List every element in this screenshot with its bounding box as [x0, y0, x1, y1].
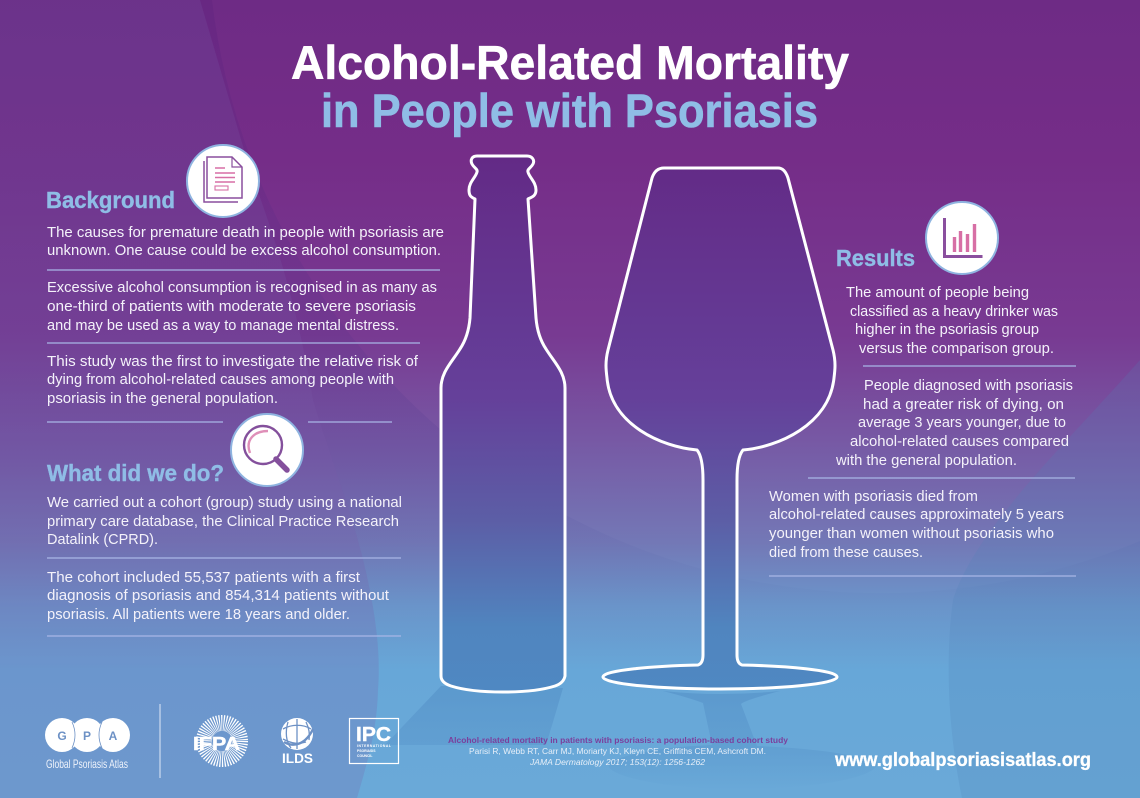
text: results paragraphs: with the general population. — [835, 453, 1017, 469]
title: in People with Psoriasis — [321, 84, 818, 137]
icon: bar chart — [926, 202, 998, 274]
logo: IFPA: IFPA — [193, 734, 240, 754]
logo: Global Psoriasis Atlas: A — [109, 729, 118, 743]
text: background paragraphs: The causes for premature death in people with psoriasis are — [47, 225, 444, 241]
text: results paragraphs: People diagnosed with psoriasis — [864, 378, 1073, 394]
text: background paragraphs: Excessive alcohol consumption is recognised in as many as — [47, 280, 437, 296]
logo: ILDS: ILDS — [282, 750, 313, 766]
citation: Parisi R, Webb RT, Carr MJ, Moriarty KJ, Kleyn CE, Griffiths CEM, Ashcroft DM. — [469, 746, 766, 756]
text: results paragraphs: had a greater risk of dying, on — [863, 397, 1064, 413]
text: results paragraphs — [769, 285, 1076, 576]
heading: results: Results — [836, 245, 915, 271]
text: results paragraphs: average 3 years younger, due to — [858, 415, 1066, 431]
logo: IFPA — [193, 723, 240, 759]
text: results paragraphs: higher in the psoriasis group — [855, 322, 1039, 338]
text: background paragraphs: This study was the first to investigate the relative risk of — [47, 354, 419, 370]
text: methods paragraphs: diagnosis of psoriasis and 854,314 patients without — [47, 588, 389, 604]
citation: JAMA Dermatology 2017; 153(12): 1256-1262 — [529, 757, 705, 767]
text: background paragraphs: unknown. One cause could be excess alcohol consumption. — [47, 243, 441, 259]
text: background paragraphs: and may be used as a way to manage mental distress. — [47, 318, 399, 334]
panel: results — [769, 202, 1076, 576]
text: results paragraphs: younger than women without psoriasis who — [769, 526, 1054, 542]
logo: ILDS — [281, 718, 313, 766]
text: results paragraphs: alcohol-related causes compared — [850, 434, 1069, 450]
text: methods paragraphs — [47, 495, 402, 636]
text: methods paragraphs: Datalink (CPRD). — [47, 532, 158, 548]
icon: document — [187, 145, 259, 217]
text: results paragraphs: died from these causes. — [769, 545, 923, 561]
text: results paragraphs: alcohol-related causes approximately 5 years — [769, 507, 1064, 523]
text: methods paragraphs: psoriasis. All patients were 18 years and older. — [47, 607, 350, 623]
text: results paragraphs: Women with psoriasis died from — [769, 489, 978, 505]
panel: what did we do — [47, 414, 402, 636]
logo: IPC: IPC — [356, 724, 391, 746]
heading: what did we do: What did we do? — [47, 460, 224, 486]
citation — [448, 735, 788, 767]
website url: www.globalpsoriasisatlas.org — [834, 750, 1091, 771]
text: results paragraphs: The amount of people being — [846, 285, 1029, 301]
text: results paragraphs: classified as a heavy drinker was — [850, 304, 1058, 320]
shadow: bottle and glass reflections — [385, 686, 878, 789]
logo: Global Psoriasis Atlas: G — [57, 729, 67, 743]
text: results paragraphs: versus the comparison group. — [859, 341, 1054, 357]
logo: IPC: INTERNATIONAL — [357, 744, 391, 748]
text: methods paragraphs: The cohort included 55,537 patients with a first — [47, 570, 360, 586]
icon: magnifying glass — [231, 414, 303, 486]
title: Alcohol-Related Mortality — [291, 36, 849, 89]
text: methods paragraphs: We carried out a cohort (group) study using a national — [47, 495, 402, 511]
panel: background — [46, 145, 444, 422]
logo: Global Psoriasis Atlas: P — [83, 729, 91, 743]
citation: Alcohol-related mortality in patients with psoriasis: a population-based cohort study — [448, 735, 788, 745]
wine glass outline — [603, 168, 837, 689]
title — [291, 36, 849, 137]
text: methods paragraphs: primary care database, the Clinical Practice Research — [47, 514, 399, 530]
logo: IPC — [350, 718, 398, 764]
bottle outline — [441, 156, 565, 692]
text: background paragraphs: one-third of patients with moderate to severe psoriasis — [47, 299, 416, 315]
logo: IPC: PSORIASIS — [357, 749, 376, 753]
text: background paragraphs: dying from alcohol-related causes among people with — [47, 372, 394, 388]
logo: Global Psoriasis Atlas: Global Psoriasis Atlas — [46, 757, 128, 771]
logo: IPC: COUNCIL — [357, 754, 372, 758]
logo: Global Psoriasis Atlas — [45, 718, 130, 771]
text: background paragraphs — [47, 225, 444, 422]
text: background paragraphs: psoriasis in the general population. — [47, 391, 278, 407]
heading: background: Background — [46, 187, 175, 213]
